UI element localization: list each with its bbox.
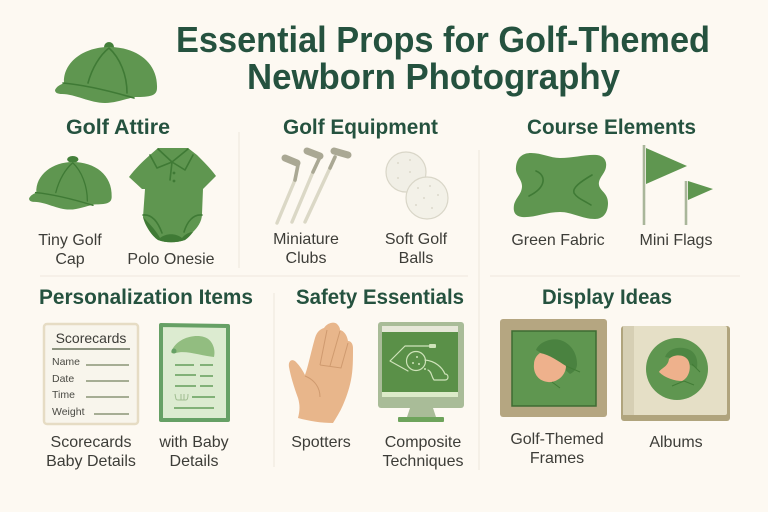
icon: large golf cap xyxy=(55,42,157,103)
icon: scorecard: Weight xyxy=(52,406,85,418)
label: composite techniques: Composite xyxy=(385,434,461,451)
label: golf-themed frames: Golf-Themed xyxy=(510,431,604,448)
label: with baby details: with Baby xyxy=(158,434,229,451)
title: Essential Props for Golf-Themed xyxy=(176,19,710,60)
icon: baby details card xyxy=(161,325,228,420)
panel: course elements xyxy=(511,116,713,249)
heading: course elements: Course Elements xyxy=(527,116,696,139)
label: green fabric: Green Fabric xyxy=(511,232,605,249)
heading: golf attire: Golf Attire xyxy=(66,116,170,139)
icon: scorecard: Date xyxy=(52,373,74,385)
label: soft golf balls: Balls xyxy=(399,250,433,267)
icon: mini flags xyxy=(644,145,713,225)
icon: miniature clubs xyxy=(277,151,348,223)
icon: golf-themed frame xyxy=(500,319,607,417)
icon: monitor with baby composite xyxy=(378,322,464,422)
label: miniature clubs: Miniature xyxy=(273,231,339,248)
label: tiny golf cap: Cap xyxy=(55,251,85,268)
title: Newborn Photography xyxy=(247,56,620,97)
icon: scorecard: Time xyxy=(52,389,75,401)
label: composite techniques: Techniques xyxy=(383,453,463,470)
icon: hand xyxy=(289,323,353,423)
panel: display ideas xyxy=(500,286,730,467)
icon: scorecard: Scorecards xyxy=(56,330,126,346)
panel: golf attire xyxy=(29,116,216,268)
icon: scorecard: Name xyxy=(52,356,80,368)
panel: safety essentials xyxy=(289,286,464,470)
heading: display ideas: Display Ideas xyxy=(542,286,672,309)
label: tiny golf cap: Tiny Golf xyxy=(38,232,102,249)
label: spotters: Spotters xyxy=(291,434,351,451)
panel: golf equipment xyxy=(273,116,448,267)
label: miniature clubs: Clubs xyxy=(286,250,326,267)
icon: green fabric xyxy=(514,153,608,219)
icon: tiny golf cap xyxy=(29,156,112,210)
icon: scorecard xyxy=(44,324,138,424)
icon: polo onesie xyxy=(129,148,216,242)
heading: personalization items: Personalization Items xyxy=(39,286,253,309)
label: soft golf balls: Soft Golf xyxy=(385,231,448,248)
heading: golf equipment: Golf Equipment xyxy=(283,116,438,139)
label: golf-themed frames: Frames xyxy=(530,450,584,467)
panel: personalization items xyxy=(39,286,253,470)
label: scorecards baby details: Scorecards xyxy=(51,434,131,451)
label: mini flags: Mini Flags xyxy=(640,232,712,249)
icon: album xyxy=(621,326,730,421)
label: albums: Albums xyxy=(649,434,703,451)
label: scorecards baby details: Baby Details xyxy=(46,453,136,470)
heading: safety essentials: Safety Essentials xyxy=(296,286,464,309)
icon: soft golf balls xyxy=(386,152,448,219)
label: with baby details: Details xyxy=(170,453,218,470)
title xyxy=(176,19,710,97)
label: polo onesie: Polo Onesie xyxy=(127,251,215,268)
